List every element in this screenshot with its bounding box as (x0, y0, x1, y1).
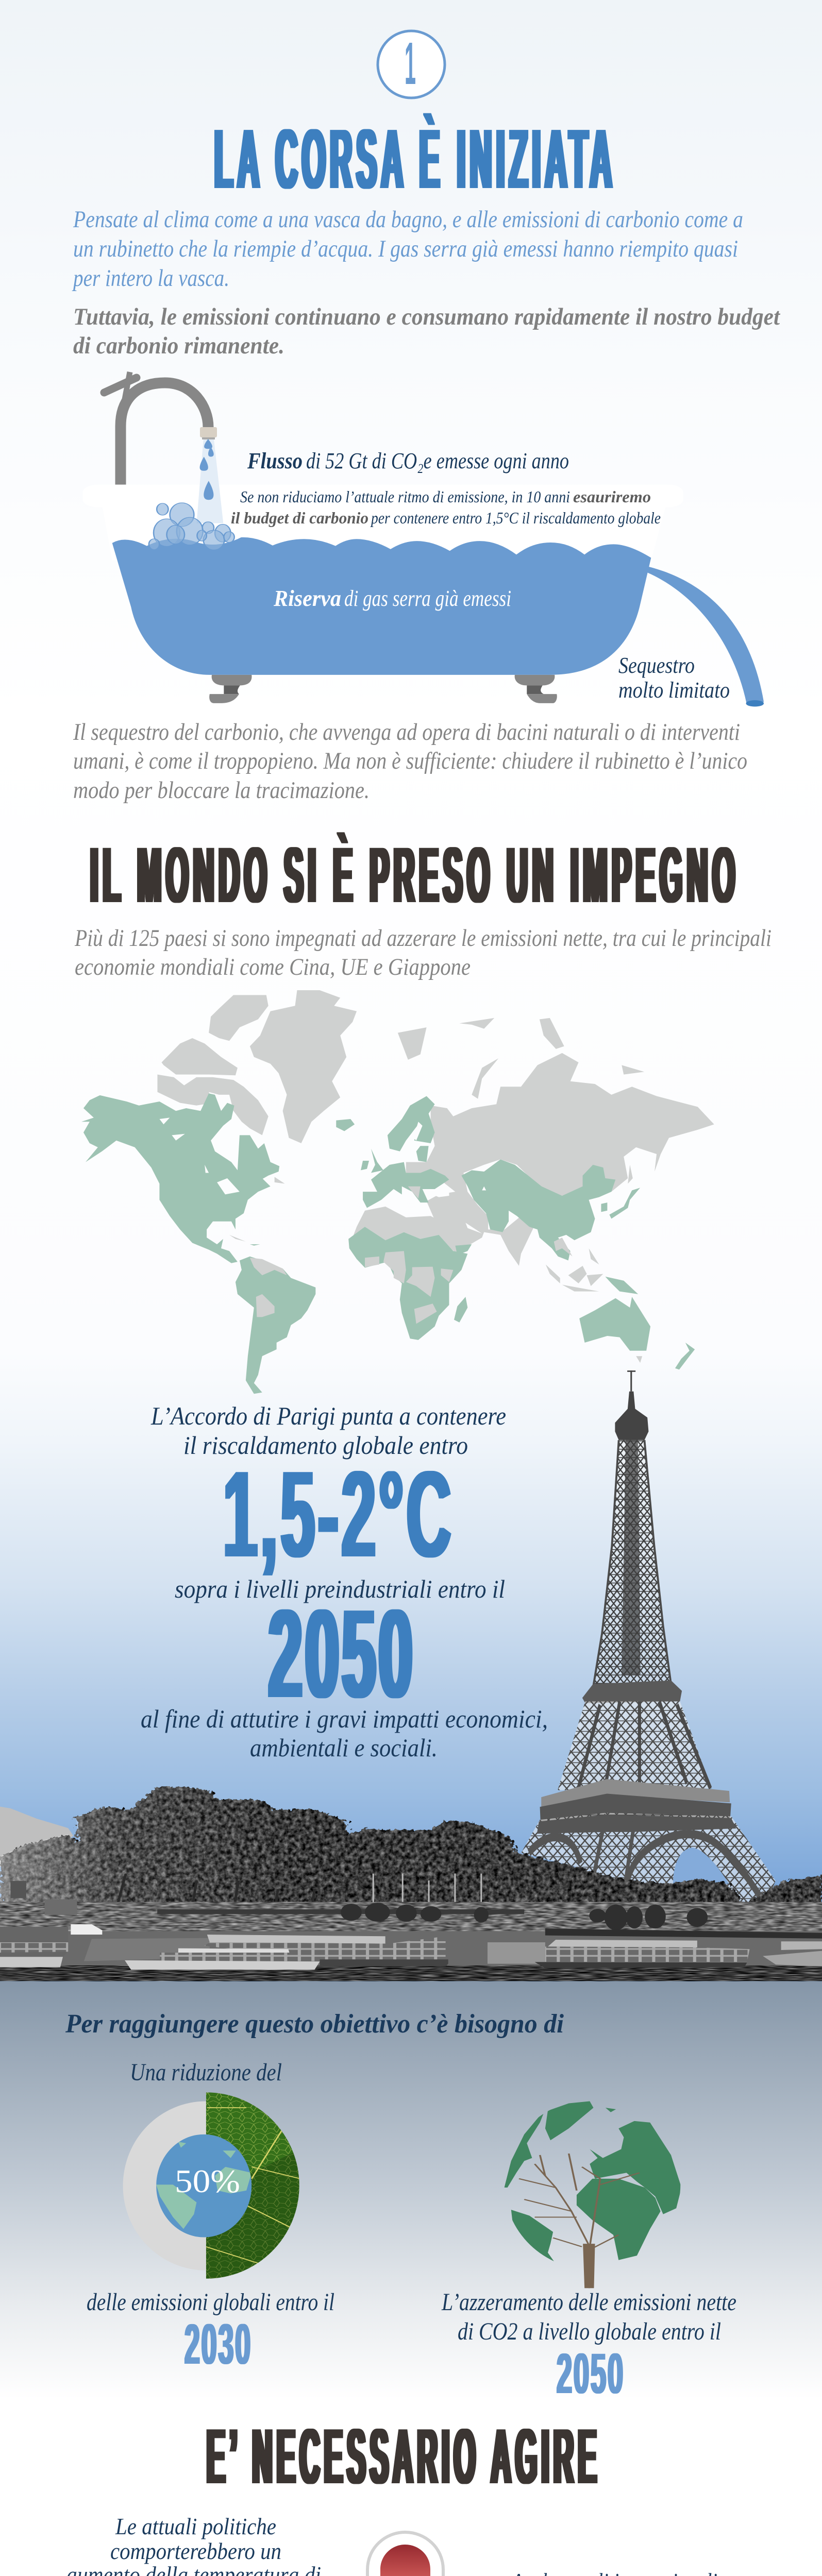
bold paragraph: di carbonio rimanente. (73, 332, 284, 359)
label: sequestro (618, 653, 730, 703)
paragraph: 125 paesi: economie mondiali come Cina, UE e Giappone (75, 954, 471, 980)
text: accordo di parigi (150, 1401, 506, 1460)
icon: overflow hose (647, 566, 764, 707)
thermometer mercury (361, 2545, 451, 2576)
eiffel: first platform (541, 1779, 730, 1808)
callout: current policies: Le attuali politiche (115, 2513, 276, 2539)
trunks (111, 1874, 481, 1928)
background: paris gradient (0, 721, 822, 1984)
label: sequestro: molto limitato (618, 677, 730, 703)
paragraph: 125 paesi (74, 925, 771, 980)
bold paragraph (73, 303, 781, 359)
tree line (0, 1787, 822, 1915)
text: gravi impatti: ambientali e sociali. (250, 1733, 438, 1762)
thermometer outline (343, 2532, 469, 2576)
text: livelli preindustriali: sopra i livelli preindustriali entro il (175, 1574, 505, 1603)
wall (0, 1902, 822, 1933)
photo: seine riverside (0, 1787, 822, 1981)
panel: obiettivo (65, 2009, 736, 2405)
text: delle emissioni: delle emissioni globali entro il (87, 2289, 334, 2316)
text: azzeramento (441, 2289, 736, 2345)
icon: water drops (200, 439, 214, 500)
label: riserva (273, 586, 511, 611)
intro paragraph: per intero la vasca. (72, 265, 229, 292)
label: riserva: Riserva (273, 586, 341, 611)
label: esauriremo budget: il budget di carbonio (231, 509, 368, 527)
icon: tub feet (209, 675, 557, 703)
heading: per raggiungere: Per raggiungere questo obiettivo c’è bisogno di (65, 2009, 564, 2039)
label: flusso: di 52 Gt di CO₂e emesse ogni anno (306, 448, 569, 473)
donut: leaf half (206, 2092, 300, 2279)
map: non-committed countries (157, 990, 714, 1363)
eiffel: legs and arches (521, 1813, 776, 1909)
donut: grey half (123, 2101, 206, 2270)
paragraph: sequestro del carbonio: modo per bloccare la tracimazione. (73, 777, 370, 804)
panel: obiettivo: 2030 (184, 2313, 252, 2376)
label: esauriremo budget: per contenere entro 1,5°C il riscaldamento globale (370, 509, 661, 527)
map: grey inserts (250, 1187, 573, 1324)
icon: faucet (104, 372, 217, 485)
eiffel tower (521, 1370, 776, 1909)
text: una riduzione: Una riduzione del (130, 2059, 282, 2086)
paragraph: sequestro del carbonio (73, 719, 747, 804)
boats (0, 1927, 822, 1970)
text: azzeramento: L’azzeramento delle emissioni nette (441, 2289, 736, 2316)
fog (0, 1787, 294, 1915)
bathtub illustration (83, 372, 764, 707)
big number: temperature target: 1,5-2°C (223, 1446, 454, 1583)
eiffel: second platform (582, 1681, 682, 1703)
bushes (341, 1903, 708, 1930)
building left (0, 1807, 73, 1867)
paris agreement text: 2050 (269, 1583, 415, 1724)
callout: current policies (66, 2513, 321, 2576)
label: flusso: Flusso (247, 448, 303, 473)
banners (10, 1881, 77, 1915)
label: sequestro: Sequestro (618, 653, 695, 678)
number badge: 1 (405, 30, 416, 97)
donut label: 50% (175, 2163, 240, 2199)
bold paragraph: Tuttavia, le emissioni continuano e consumano rapidamente il nostro budget (73, 303, 781, 330)
label: riserva: di gas serra già emessi (344, 586, 511, 611)
eiffel: middle section (558, 1701, 712, 1790)
icon: globe tree (505, 2101, 681, 2288)
panel: la corsa è iniziata (72, 30, 781, 359)
eiffel: antenna and top (615, 1370, 648, 1440)
text: gravi impatti (141, 1704, 548, 1762)
tub body (83, 485, 683, 675)
text: azzeramento: di CO2 a livello globale entro il (458, 2318, 721, 2345)
number badge (378, 30, 445, 98)
panel: obiettivo: 2050 (557, 2342, 625, 2405)
label: esauriremo budget: Se non riduciamo l’attuale ritmo di emissione, in 10 anni (240, 487, 570, 506)
page background top (0, 0, 822, 721)
icon: bubbles (149, 503, 234, 550)
label: esauriremo budget: esauriremo (573, 487, 651, 506)
label: flusso (247, 448, 569, 473)
world map (81, 990, 714, 1394)
callout: current policies: comporterebbero un (110, 2538, 281, 2564)
map: lakes and seas (159, 1117, 486, 1233)
donut: globe (156, 2134, 251, 2237)
background: objective section (0, 1981, 822, 2399)
quay and water (0, 1924, 822, 1981)
text: gravi impatti: al fine di attutire i gravi impatti economici, (141, 1704, 548, 1733)
thermometer chart (47, 2513, 760, 2576)
paris agreement text (141, 1401, 548, 1762)
text: accordo di parigi: L’Accordo di Parigi punta a contenere (150, 1401, 506, 1430)
intro paragraph (72, 206, 743, 292)
label: esauriremo budget (231, 487, 661, 527)
water stream (196, 439, 223, 523)
text: accordo di parigi: il riscaldamento globale entro (183, 1431, 468, 1460)
eiffel: upper section (593, 1440, 672, 1687)
map: committed countries (81, 1093, 695, 1394)
